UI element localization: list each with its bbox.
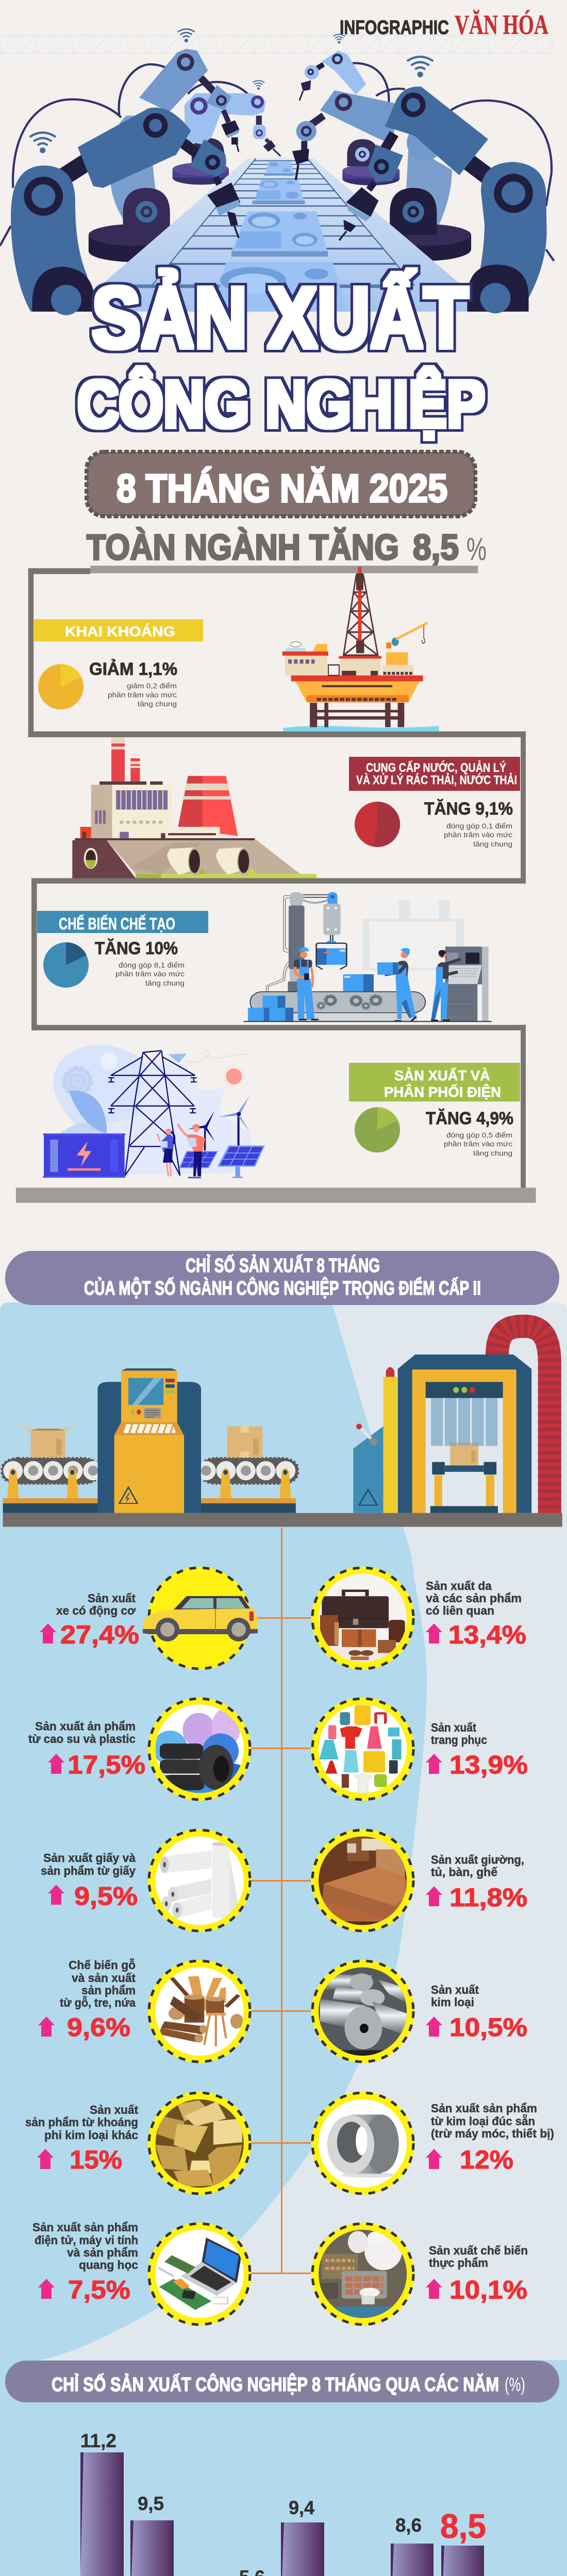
value: water and waste: TĂNG 9,1%: [424, 799, 513, 819]
label: Sản xuất: [431, 1721, 476, 1734]
item: paper: [41, 1829, 251, 1932]
label: water and waste: [349, 757, 520, 791]
up arrow: [37, 2149, 54, 2169]
bar: 2025: 8,5: [440, 2507, 486, 2545]
note: water and waste: [444, 822, 512, 848]
label: Sản xuất: [90, 2103, 138, 2116]
illustration: production line machines: [2, 1326, 562, 1527]
title: SẢN XUẤT: [92, 268, 469, 367]
label: Sản xuất ản phẩm: [35, 1720, 136, 1733]
label: trang phục: [431, 1733, 487, 1747]
item: metals: [311, 1960, 527, 2063]
item: non-metallic minerals: [25, 2092, 251, 2195]
label: từ cao su và plastic: [28, 1732, 136, 1745]
illustration: factory line with workers: [244, 892, 492, 1022]
value: 10,1%: [449, 2275, 527, 2304]
label: [431, 1983, 479, 2009]
illustration: power tower and renewables: [43, 1045, 265, 1178]
bar: 2018: 11,2: [80, 2430, 116, 2451]
label: Sản xuất giấy và: [43, 1851, 136, 1865]
badge: 8 months of 2025: 8 THÁNG NĂM 2025: [116, 467, 447, 511]
item: food processing: [311, 2223, 528, 2326]
note: electricity: đóng góp 0,5 điểm: [446, 1131, 512, 1139]
label: thực phẩm: [429, 2256, 488, 2269]
label: và các sản phẩm: [426, 1591, 522, 1605]
note: water and waste: tăng chung: [473, 840, 512, 848]
connector lines: [251, 1528, 311, 2274]
bar: 2018: [80, 2430, 124, 2576]
icon: steel coil: [311, 2092, 414, 2195]
up arrow: [426, 1886, 442, 1906]
label: sản phẩm từ khoáng: [25, 2115, 138, 2129]
note: water and waste: đóng góp 0,1 điểm: [446, 822, 512, 830]
label: [56, 1591, 136, 1617]
up arrow: [426, 2016, 442, 2037]
label: mining: [34, 619, 203, 641]
label: [431, 1721, 487, 1747]
value: 15%: [70, 2145, 122, 2174]
label: Sản xuất giường,: [431, 1853, 524, 1867]
value: manufacturing: TĂNG 10%: [95, 939, 178, 958]
label: và sản xuất: [72, 1971, 136, 1985]
note: manufacturing: đóng góp 8,1 điểm: [119, 961, 185, 969]
label: [431, 1853, 524, 1878]
label: xe có động cơ: [56, 1604, 136, 1617]
heading: key sectors: [5, 1251, 559, 1305]
label: [429, 2244, 528, 2269]
headline: whole industry up 8.5%: TOÀN NGÀNH TĂNG: [87, 527, 399, 567]
label: manufacturing: CHẾ BIẾN CHẾ TẠO: [59, 914, 175, 933]
item: fabricated metals: [311, 2092, 554, 2195]
staircase frame: [16, 566, 536, 1203]
pie chart: water and waste: [355, 802, 400, 847]
icon: leather goods: [311, 1567, 414, 1670]
label: water and waste: VÀ XỬ LÝ RÁC THẢI, NƯỚC THẢI: [356, 772, 517, 787]
bar: 2024: 8,6: [395, 2515, 422, 2536]
value: 10,5%: [449, 2013, 527, 2042]
item: motor vehicles: [40, 1567, 258, 1670]
icon: tires and plastic: [148, 1698, 253, 1801]
note: mining: tăng chung: [138, 700, 177, 708]
label: Sản xuất: [88, 1591, 136, 1605]
heading: key sectors: CHỈ SỐ SẢN XUẤT 8 THÁNG: [186, 1253, 380, 1277]
up arrow: [48, 1885, 64, 1905]
bar chart: index by year: [39, 2430, 527, 2576]
label: tủ, bàn, ghế: [431, 1865, 497, 1878]
icon: clothing: [311, 1698, 414, 1801]
item: rubber and plastic: [28, 1698, 253, 1801]
label: sản phẩm: [81, 1984, 136, 1997]
panel: mining: [34, 567, 439, 732]
icon: mineral ore: [148, 2092, 251, 2195]
label: kim loại: [431, 1995, 474, 2009]
heading: yearly index: [5, 2361, 559, 2402]
icon: car: [143, 1567, 258, 1670]
note: mining: giảm 0,2 điểm: [127, 682, 177, 690]
title: CÔNG NGHIỆP: [77, 366, 485, 442]
pie chart: manufacturing: [43, 942, 89, 988]
up arrow: [38, 2016, 55, 2037]
label: [28, 1720, 136, 1745]
label: Sản xuất: [431, 1983, 479, 1996]
item: leather: [311, 1567, 526, 1670]
label: [60, 1958, 136, 2009]
value: 11,8%: [449, 1883, 527, 1912]
bar: 2022: 9,4: [289, 2497, 314, 2518]
label: [25, 2103, 138, 2142]
label: từ kim loại đúc sẵn: [431, 2114, 535, 2128]
label: electricity: SẢN XUẤT VÀ: [394, 1067, 490, 1083]
note: electricity: phần trăm vào mức: [444, 1140, 512, 1148]
label: [431, 2102, 554, 2140]
background: light panel with blue shape: [0, 1302, 567, 2576]
label: Sản xuất sản phẩm: [32, 2221, 138, 2234]
bar: 2019: [130, 2493, 174, 2576]
icon: metal rolls: [311, 1960, 414, 2063]
icon: food factory: [311, 2223, 414, 2326]
label: Chế biến gỗ: [69, 1958, 136, 1972]
value: 9,5%: [74, 1882, 138, 1910]
headline: whole industry up 8.5%: %: [466, 532, 487, 567]
panel: manufacturing: [37, 892, 492, 1022]
panel: electricity: [43, 1045, 520, 1178]
panel: water and waste: [72, 738, 520, 878]
up arrow: [426, 2149, 442, 2169]
label: điện tử, máy vi tính: [35, 2233, 138, 2247]
pie chart: electricity: [355, 1107, 400, 1153]
value: 12%: [460, 2145, 513, 2174]
note: water and waste: phần trăm vào mức: [444, 831, 512, 839]
title: [77, 268, 485, 442]
value: 17,5%: [68, 1751, 145, 1780]
up arrow: [426, 1754, 442, 1774]
header brand: INFOGRAPHIC: [340, 17, 449, 39]
note: manufacturing: phần trăm vào mức: [115, 970, 185, 978]
note: manufacturing: tăng chung: [145, 979, 185, 987]
label: và sản phẩm: [67, 2246, 138, 2259]
badge: 8 months of 2025: [87, 452, 475, 516]
label: [32, 2221, 138, 2272]
label: electricity: [349, 1063, 520, 1101]
value: 27,4%: [60, 1620, 139, 1649]
up arrow: [40, 1623, 56, 1643]
icon: laptop and circuit board: [148, 2223, 251, 2326]
icon: paper rolls: [148, 1829, 251, 1932]
label: [41, 1851, 136, 1877]
item: electronics: [32, 2221, 251, 2326]
icon: wooden bed: [311, 1829, 414, 1932]
label: [426, 1579, 522, 1617]
note: electricity: tăng chung: [473, 1149, 512, 1157]
note: manufacturing: [115, 961, 185, 987]
label: water and waste: CUNG CẤP NƯỚC, QUẢN LÝ: [366, 760, 506, 775]
item: wood processing: [38, 1958, 251, 2063]
note: mining: phần trăm vào mức: [108, 690, 177, 699]
value: 7,5%: [68, 2275, 130, 2304]
note: electricity: [444, 1131, 512, 1157]
value: electricity: TĂNG 4,9%: [426, 1109, 513, 1128]
label: Sản xuất da: [426, 1579, 492, 1592]
illustration: oil rig: [282, 567, 439, 732]
icon: timber: [148, 1960, 251, 2063]
item: apparel: [311, 1698, 528, 1801]
bar: 2022: [281, 2497, 324, 2576]
heading: yearly index: (%): [505, 2374, 525, 2395]
value: 13,9%: [449, 1751, 528, 1780]
label: Sản xuất sản phẩm: [431, 2102, 537, 2115]
pie chart: mining: [38, 664, 84, 709]
up arrow: [426, 1623, 442, 1643]
bar: 2019: 9,5: [138, 2493, 164, 2514]
value: 13,4%: [448, 1620, 526, 1649]
header brand: [340, 9, 548, 40]
bar: 2024: [391, 2515, 433, 2576]
label: có liên quan: [426, 1604, 494, 1617]
label: quang học: [79, 2258, 138, 2272]
headline: whole industry up 8.5%: 8,5: [413, 527, 459, 567]
value: 9,6%: [67, 2013, 130, 2042]
value: mining: GIẢM 1,1%: [89, 659, 177, 679]
label: sản phẩm từ giấy: [41, 1864, 136, 1877]
label: từ gỗ, tre, nứa: [60, 1995, 136, 2009]
label: mining: KHAI KHOÁNG: [65, 623, 175, 639]
item: furniture: [311, 1829, 527, 1932]
bar: 2025: [440, 2507, 486, 2576]
label: phi kim loại khác: [44, 2128, 138, 2142]
label: electricity: PHÂN PHỐI ĐIỆN: [384, 1083, 501, 1100]
up arrow: [38, 2279, 55, 2299]
up arrow: [48, 1754, 64, 1774]
note: mining: [108, 682, 177, 708]
label: Sản xuất chế biến: [429, 2244, 528, 2257]
label: (trừ máy móc, thiết bị): [431, 2127, 554, 2140]
illustration: treatment plant: [72, 738, 316, 878]
illustration: robot arms over conveyor: [0, 29, 554, 315]
up arrow: [426, 2279, 442, 2299]
